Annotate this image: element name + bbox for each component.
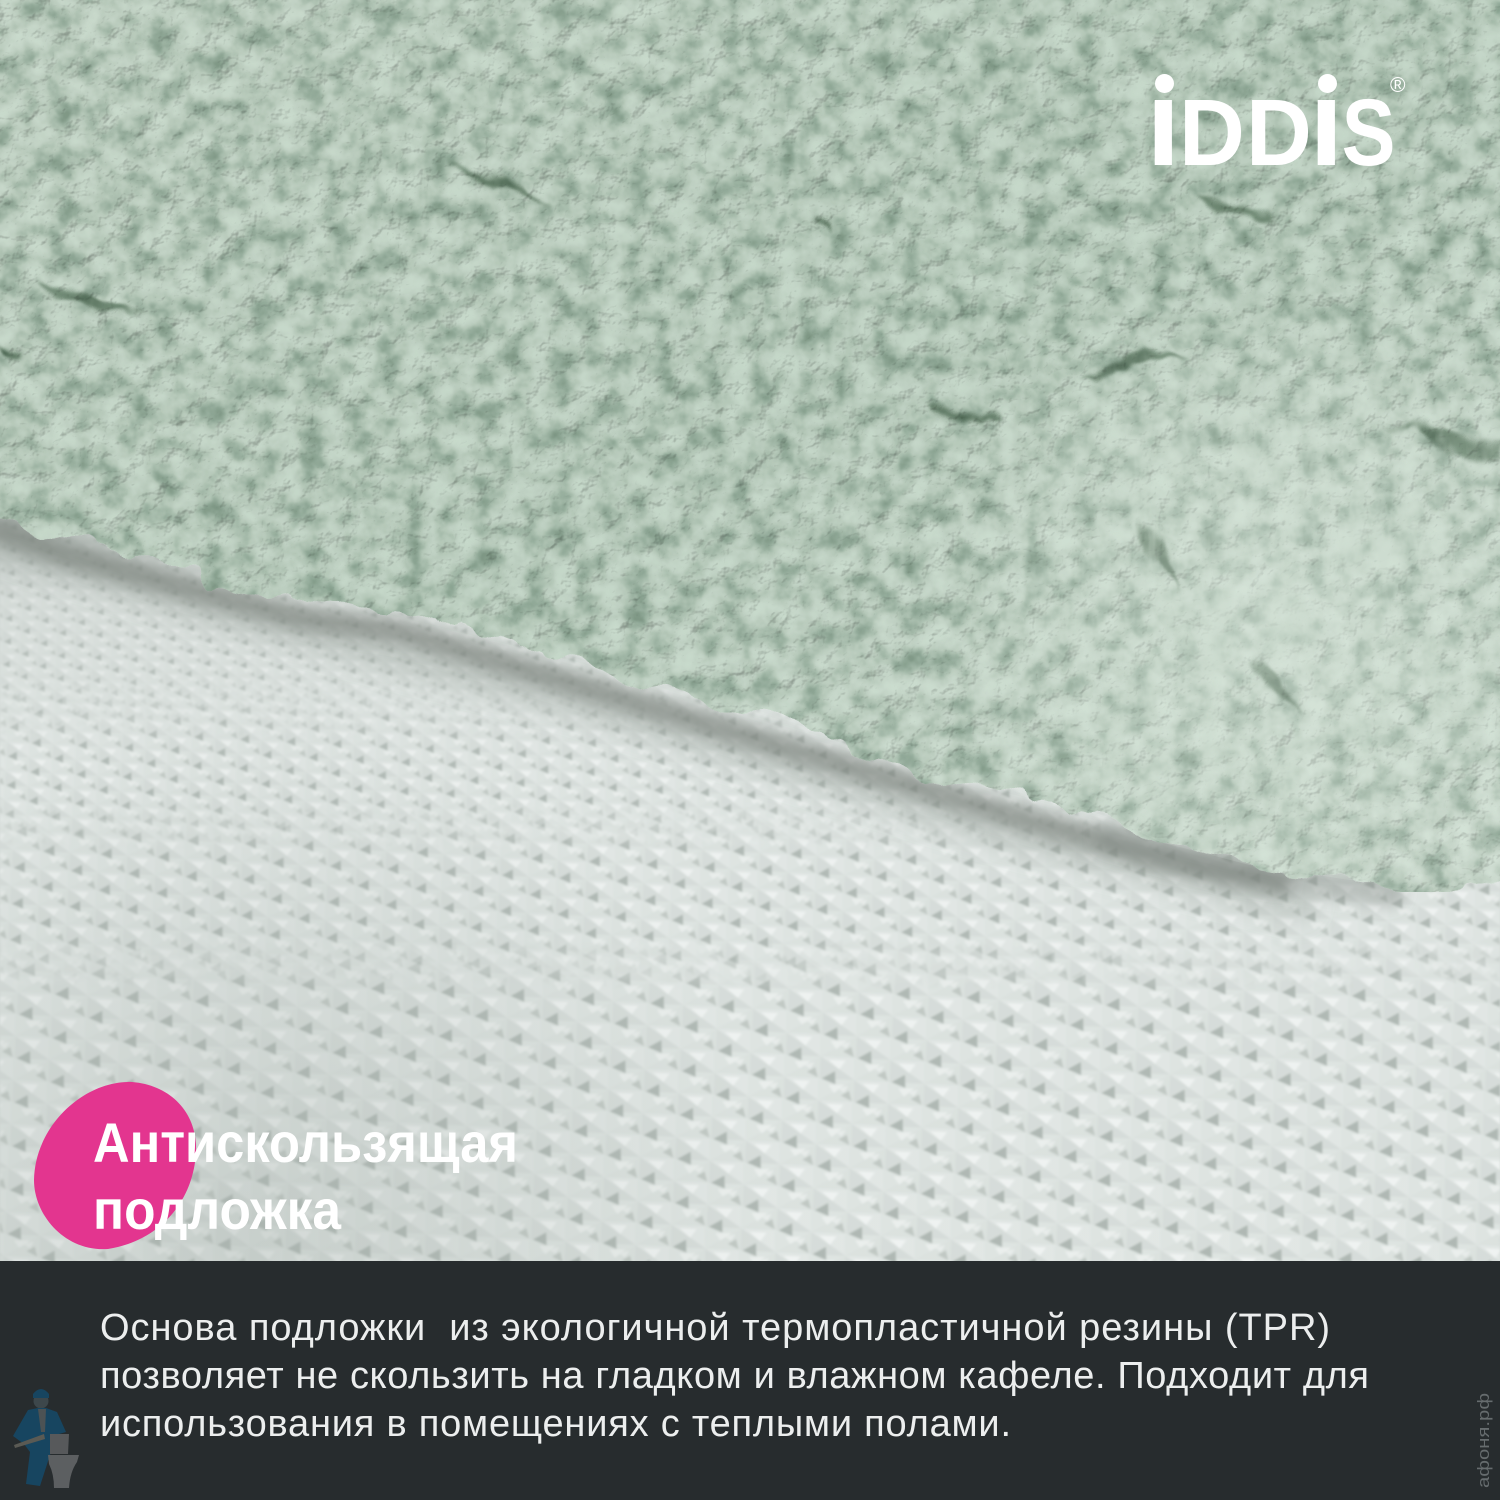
icon: plumber watermark [13,1389,79,1488]
description text: позволяет не скользить на гладком и влажном кафеле. Подходит для [100,1355,1369,1397]
logo: IDDIS: S [1342,79,1395,185]
description text: Основа подложки из экологичной термопластичной резины (TPR) [100,1307,1330,1349]
watermark: site name: афоня.рф [1474,1393,1493,1488]
logo: IDDIS: D [1246,79,1312,185]
fluffy green bath mat [0,0,1500,920]
description text: использования в помещениях с теплыми полами. [100,1403,1011,1445]
logo: IDDIS: ® [1390,74,1406,97]
photo: anti-slip rubber backing [0,480,1500,1280]
rubber shading [0,500,1500,1261]
heading: подложка [93,1178,342,1241]
pink circle accent [34,1082,196,1249]
logo: IDDIS: i [1309,53,1344,192]
shadow under the mat [0,530,1390,905]
logo: IDDIS: D [1179,79,1245,185]
dark description panel [0,1261,1500,1500]
logo: IDDIS: i [1146,53,1181,192]
logo: IDDIS [1154,74,1406,166]
heading: Антискользящая [93,1111,518,1174]
mat creases [0,163,1500,712]
